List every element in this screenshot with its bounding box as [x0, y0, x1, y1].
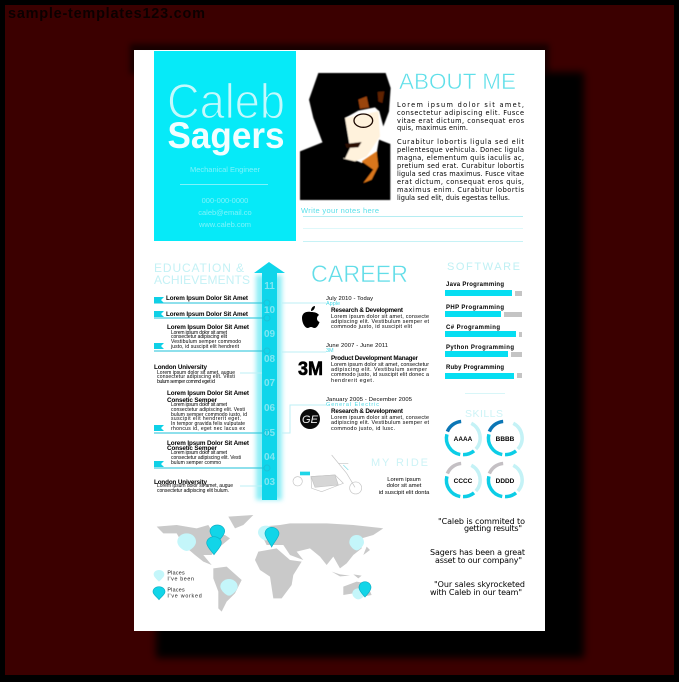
- career entry: 3M: hendrerit eget.: [331, 378, 374, 384]
- timeline years: 06: [264, 403, 275, 414]
- map legend: Places: [167, 570, 185, 576]
- career entry: GE: Research & Development: [331, 408, 404, 415]
- text block: about me: quis, maximus enim.: [397, 124, 468, 132]
- contact details: caleb@email.co: [198, 208, 252, 217]
- text block: education entries: Lorem Ipsum Dolor Sit Amet: [167, 324, 250, 331]
- text block: about me: [397, 101, 525, 202]
- map legend: Places: [167, 588, 185, 594]
- text block: education entries: bulum semper commodo iusto, id: [171, 412, 247, 418]
- career entry: GE: [300, 397, 430, 432]
- world map: [153, 515, 383, 612]
- text block: my ride: Lorem ipsum: [387, 477, 421, 483]
- heading: software: SOFTWARE: [447, 261, 520, 273]
- timeline years: 07: [264, 378, 275, 389]
- testimonials: "Caleb is commited to: [438, 517, 525, 526]
- pins: places I've been: [177, 526, 365, 599]
- career entry: GE: GE: [302, 414, 319, 426]
- career entry: GE: commodo justo, id lusc.: [331, 426, 395, 432]
- career entry: Apple: Lorem ipsum dolor sit amet, consecte: [331, 314, 429, 320]
- text block: my ride: id suscipit elit donta: [379, 490, 430, 496]
- panel: name and contact: [154, 51, 296, 241]
- career entry: GE: January 2005 - December 2005: [326, 397, 412, 403]
- career entry: GE: Lorem ipsum dolor sit amet, consecte: [331, 415, 429, 421]
- logo: 3M: 3M: [298, 359, 323, 380]
- text block: education entries: London University: [154, 364, 207, 371]
- text block: education entries: In tempor gravida felis vulputate: [171, 421, 245, 427]
- text block: education entries: Lorem ipsum dolor sit amet: [171, 402, 228, 408]
- donut: CCCC: CCCC: [454, 478, 473, 485]
- career entry: Apple: [302, 296, 430, 330]
- career entry: GE: adipiscing elit. Vestibulum semper et: [331, 420, 430, 426]
- heading: about me: ABOUT ME: [399, 69, 516, 94]
- text block: education entries: Lorem Ipsum Dolor Sit Amet: [167, 440, 250, 447]
- timeline years: 03: [264, 477, 275, 488]
- testimonials: Sagers has been a great: [430, 548, 525, 557]
- text block: education entries: suscipit elit hendrerit eget.: [171, 416, 241, 422]
- text block: education entries: Lorem ipsum dolor sit amet, augue: [157, 370, 235, 376]
- career entry: Apple: Research & Development: [331, 307, 404, 314]
- text block: education entries: consectetur adipiscing elit. Vesti: [157, 374, 235, 380]
- contact details: [198, 196, 252, 229]
- text block: education entries: Lorem ipsum dolor sit amet: [171, 330, 228, 336]
- bar chart: software skills: Java Programming: [446, 282, 504, 288]
- career entry: 3M: Lorem ipsum dolor sit amet, consectetur: [331, 362, 429, 368]
- text block: education entries: Lorem Ipsum Dolor Sit Amet: [166, 295, 249, 302]
- bar chart: software skills: [445, 282, 522, 379]
- text block: education entries: rhoncus id, eget nec lacus ex: [171, 426, 246, 432]
- career entry: 3M: Product Development Manager: [331, 355, 419, 362]
- watermark: sample-templates123.com: [8, 6, 205, 22]
- timeline years: 11: [264, 281, 275, 292]
- timeline years: 05: [264, 428, 275, 439]
- text block: education entries: London University: [154, 479, 207, 486]
- name: Caleb: Caleb: [167, 75, 285, 129]
- text block: education entries: bulum semper commd eget id: [157, 379, 215, 385]
- text block: about me: maximus enim. Curabitur lobortis: [397, 186, 525, 194]
- testimonials: with Caleb in our team": [430, 588, 522, 597]
- map legend: [153, 570, 202, 600]
- contact details: 000-000-0000: [202, 196, 248, 205]
- career entry: 3M: June 2007 - June 2011: [326, 343, 388, 349]
- text block: about me: pellentesque vehicula. Donec ligula: [397, 146, 524, 154]
- testimonials: getting results": [464, 524, 522, 533]
- text block: education entries: consectetur adipiscing elit. Vesti: [171, 407, 245, 413]
- text block: about me: erat dictum, consequat eros quis,: [397, 178, 524, 186]
- text block: education entries: consectetur adipiscing elit bulum.: [157, 488, 229, 494]
- text block: education entries: consectetur adipiscing elit: [171, 334, 228, 340]
- career entry: Apple: commodo justo, id suscipit elit: [331, 324, 412, 330]
- career entry: 3M: 3M: [326, 348, 334, 354]
- testimonials: "Our sales skyrocketed: [434, 580, 525, 589]
- text block: about me: consectetur adipiscing elit. Fusce: [397, 109, 524, 117]
- text block: my ride: [379, 477, 430, 496]
- map legend: I've been: [167, 576, 194, 582]
- contact details: www.caleb.com: [198, 220, 251, 229]
- career entry: 3M: adipiscing elit. Vestibulum semper: [331, 367, 427, 373]
- job title: Mechanical Engineer: [190, 165, 261, 174]
- notes lines: Write your notes here: [301, 206, 379, 215]
- icons: graduation tags: [154, 297, 164, 467]
- white resume page: [134, 50, 545, 631]
- timeline years: [264, 281, 275, 488]
- text block: about me: Lorem ipsum dolor sit amet,: [397, 101, 524, 109]
- bar chart: software skills: C# Programming: [446, 325, 500, 331]
- bar chart: software skills: PHP Programming: [446, 305, 504, 311]
- text block: about me: vitae erat dictum, consequat eros: [397, 117, 525, 125]
- photo: portrait: [300, 71, 391, 200]
- text block: education entries: [154, 295, 250, 494]
- pins: places I've worked: [207, 525, 371, 597]
- timeline connectors: [154, 300, 326, 486]
- career entry: Apple: July 2010 - Today: [326, 296, 373, 302]
- text block: education entries: Lorem Ipsum Dolor Sit Amet: [167, 390, 250, 397]
- donut: BBBB: BBBB: [496, 436, 515, 443]
- career entry: Apple: Apple: [326, 301, 340, 307]
- text block: education entries: bulum semper commo: [171, 460, 221, 466]
- heading: career: CAREER: [311, 261, 408, 288]
- timeline years: 09: [264, 329, 275, 340]
- heading: skills: SKILLS: [465, 408, 503, 420]
- logo: General Electric: [300, 409, 320, 429]
- career entry: Apple: adipiscing elit. Vestibulum semper et: [331, 319, 430, 325]
- donut: DDDD: DDDD: [496, 478, 515, 485]
- text block: about me: pretium sed erat. Curabitur lobortis: [397, 162, 525, 170]
- text block: my ride: dolor sit amet: [387, 483, 422, 489]
- text block: about me: ligula sed elit, duis egestas tellus.: [397, 194, 510, 202]
- icon: motorcycle: [293, 455, 362, 494]
- timeline years: 04: [264, 452, 275, 463]
- donut charts: skills: [446, 421, 522, 497]
- name: Sagers: Sagers: [168, 115, 284, 156]
- text block: education entries: Consetic Semper: [167, 397, 218, 404]
- text block: education entries: justo, id suscipit elit hendrerit: [170, 344, 240, 350]
- heading: education and achievements: ACHIEVEMENTS: [154, 273, 250, 287]
- icon: Apple logo: [302, 306, 320, 328]
- timeline arrow: [254, 262, 285, 500]
- bar chart: software skills: Python Programming: [446, 345, 514, 351]
- career entry: 3M: [298, 343, 429, 384]
- text block: education entries: Lorem Ipsum Dolor Sit Amet: [166, 311, 249, 318]
- timeline years: 08: [264, 354, 275, 365]
- bar chart: software skills: Ruby Programming: [446, 365, 504, 371]
- text block: about me: ligula sed cras maximus. Fusce vitae: [397, 170, 524, 178]
- heading: my ride: MY RIDE: [371, 457, 428, 469]
- testimonials: asset to our company": [435, 556, 522, 565]
- donut: AAAA: AAAA: [454, 436, 473, 443]
- text block: about me: Curabitur lobortis ligula sed elit: [397, 138, 524, 146]
- career entry: 3M: commodo justo, id suscipit elit donec a: [331, 372, 429, 378]
- heading: education and achievements: [154, 261, 250, 287]
- text block: about me: magna, elementum quis iaculis ac,: [397, 154, 524, 162]
- text block: education entries: consectetur adipiscing elit. Vesti: [171, 455, 241, 461]
- text block: education entries: Lorem ipsum dolor sit amet, augue: [157, 483, 233, 489]
- career entry: GE: General Electric: [326, 402, 379, 408]
- timeline years: 10: [264, 305, 275, 316]
- text block: education entries: Vestibulum semper commodo: [171, 339, 241, 345]
- text block: education entries: Consetic Semper: [167, 445, 218, 452]
- text block: education entries: Lorem ipsum dolor sit amet: [171, 450, 228, 456]
- map legend: I've worked: [167, 593, 202, 599]
- testimonials: [430, 517, 525, 597]
- heading: education and achievements: EDUCATION &: [154, 261, 244, 275]
